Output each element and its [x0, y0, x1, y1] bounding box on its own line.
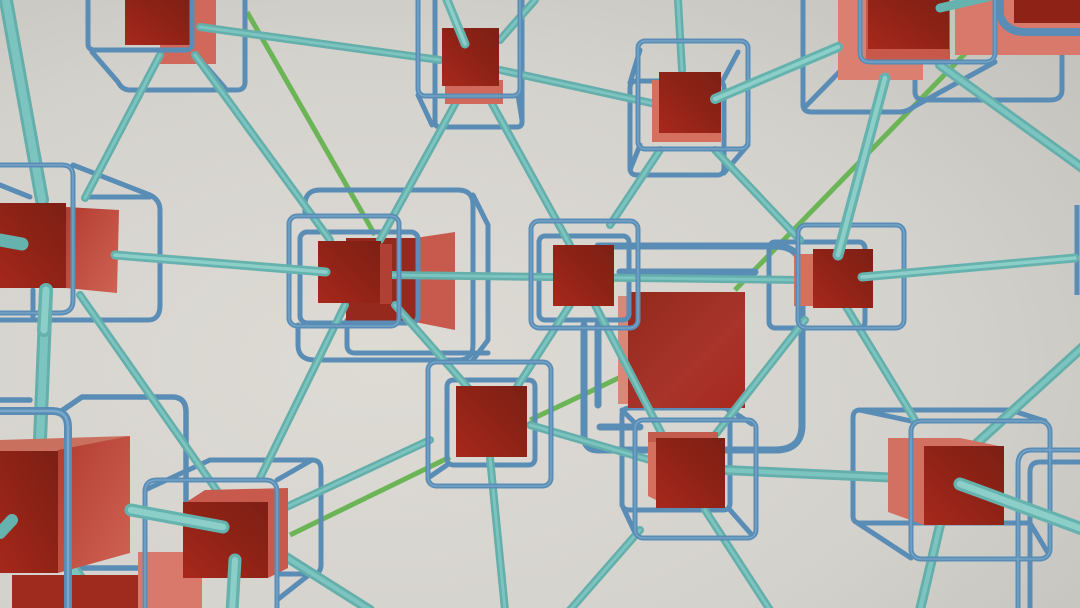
frame: upper right corner: [1000, 0, 1080, 32]
back cube: left centre: [346, 232, 455, 330]
back frame: lower centre: [428, 380, 535, 478]
cube: upper centre: [652, 72, 721, 142]
back frame: top centre: [418, 0, 522, 127]
cube: lower right: [888, 438, 1004, 525]
back frame: left centre inner: [300, 232, 418, 323]
frame: right edge: [1074, 205, 1080, 295]
cube: right centre: [794, 249, 873, 308]
frame: top centre: [418, 0, 520, 96]
cube: lower centre: [456, 386, 527, 457]
back cube: top left: [160, 0, 216, 64]
back frame: bottom left: [0, 397, 186, 608]
back cube: top right: [955, 0, 1080, 55]
back frame: lower mid: [622, 408, 752, 535]
back frame: upper centre: [630, 50, 748, 175]
cube: bottom mid left: [183, 488, 288, 578]
frame: upper centre: [638, 41, 748, 149]
back frame: upper right: [803, 0, 995, 112]
frame: bottom mid left: [145, 480, 277, 608]
frame: right centre: [798, 225, 904, 328]
frame: lower centre: [428, 362, 551, 486]
frame: left: [0, 165, 73, 313]
cube: left: [0, 203, 119, 293]
back frame: right centre inner: [769, 242, 865, 328]
back frame: lower right: [853, 410, 1048, 558]
frame: bottom left: [0, 411, 68, 608]
cube: bottom far left: [12, 552, 202, 608]
inner frames of middle row: [300, 232, 865, 328]
back frame: large centre: [584, 246, 802, 450]
frame: upper right: [860, 0, 995, 62]
frame: top left: [88, 0, 192, 50]
back frame: top left: [92, 0, 245, 90]
cube: upper right: [838, 0, 950, 80]
frame: lower right: [911, 421, 1050, 559]
back frame: left: [0, 165, 160, 320]
cube: top left: [125, 0, 190, 45]
green rods: [247, 12, 988, 535]
back frame: large left centre: [298, 190, 488, 360]
back frame: centre inner: [539, 236, 629, 320]
back cube: large centre: [618, 292, 745, 408]
frame: centre: [531, 221, 638, 328]
frame: left centre: [289, 216, 399, 326]
cube: left centre: [318, 241, 392, 304]
frame: lower mid: [635, 420, 756, 538]
frame: bottom right: [1018, 450, 1080, 608]
cube: top centre: [442, 28, 503, 104]
back frame: bottom mid left: [145, 460, 321, 600]
cube: lower mid: [648, 432, 725, 508]
back frame: top right corner: [915, 50, 1062, 100]
cube: centre: [553, 245, 614, 306]
back cubes: [160, 0, 1080, 408]
cube: bottom left: [0, 436, 130, 573]
